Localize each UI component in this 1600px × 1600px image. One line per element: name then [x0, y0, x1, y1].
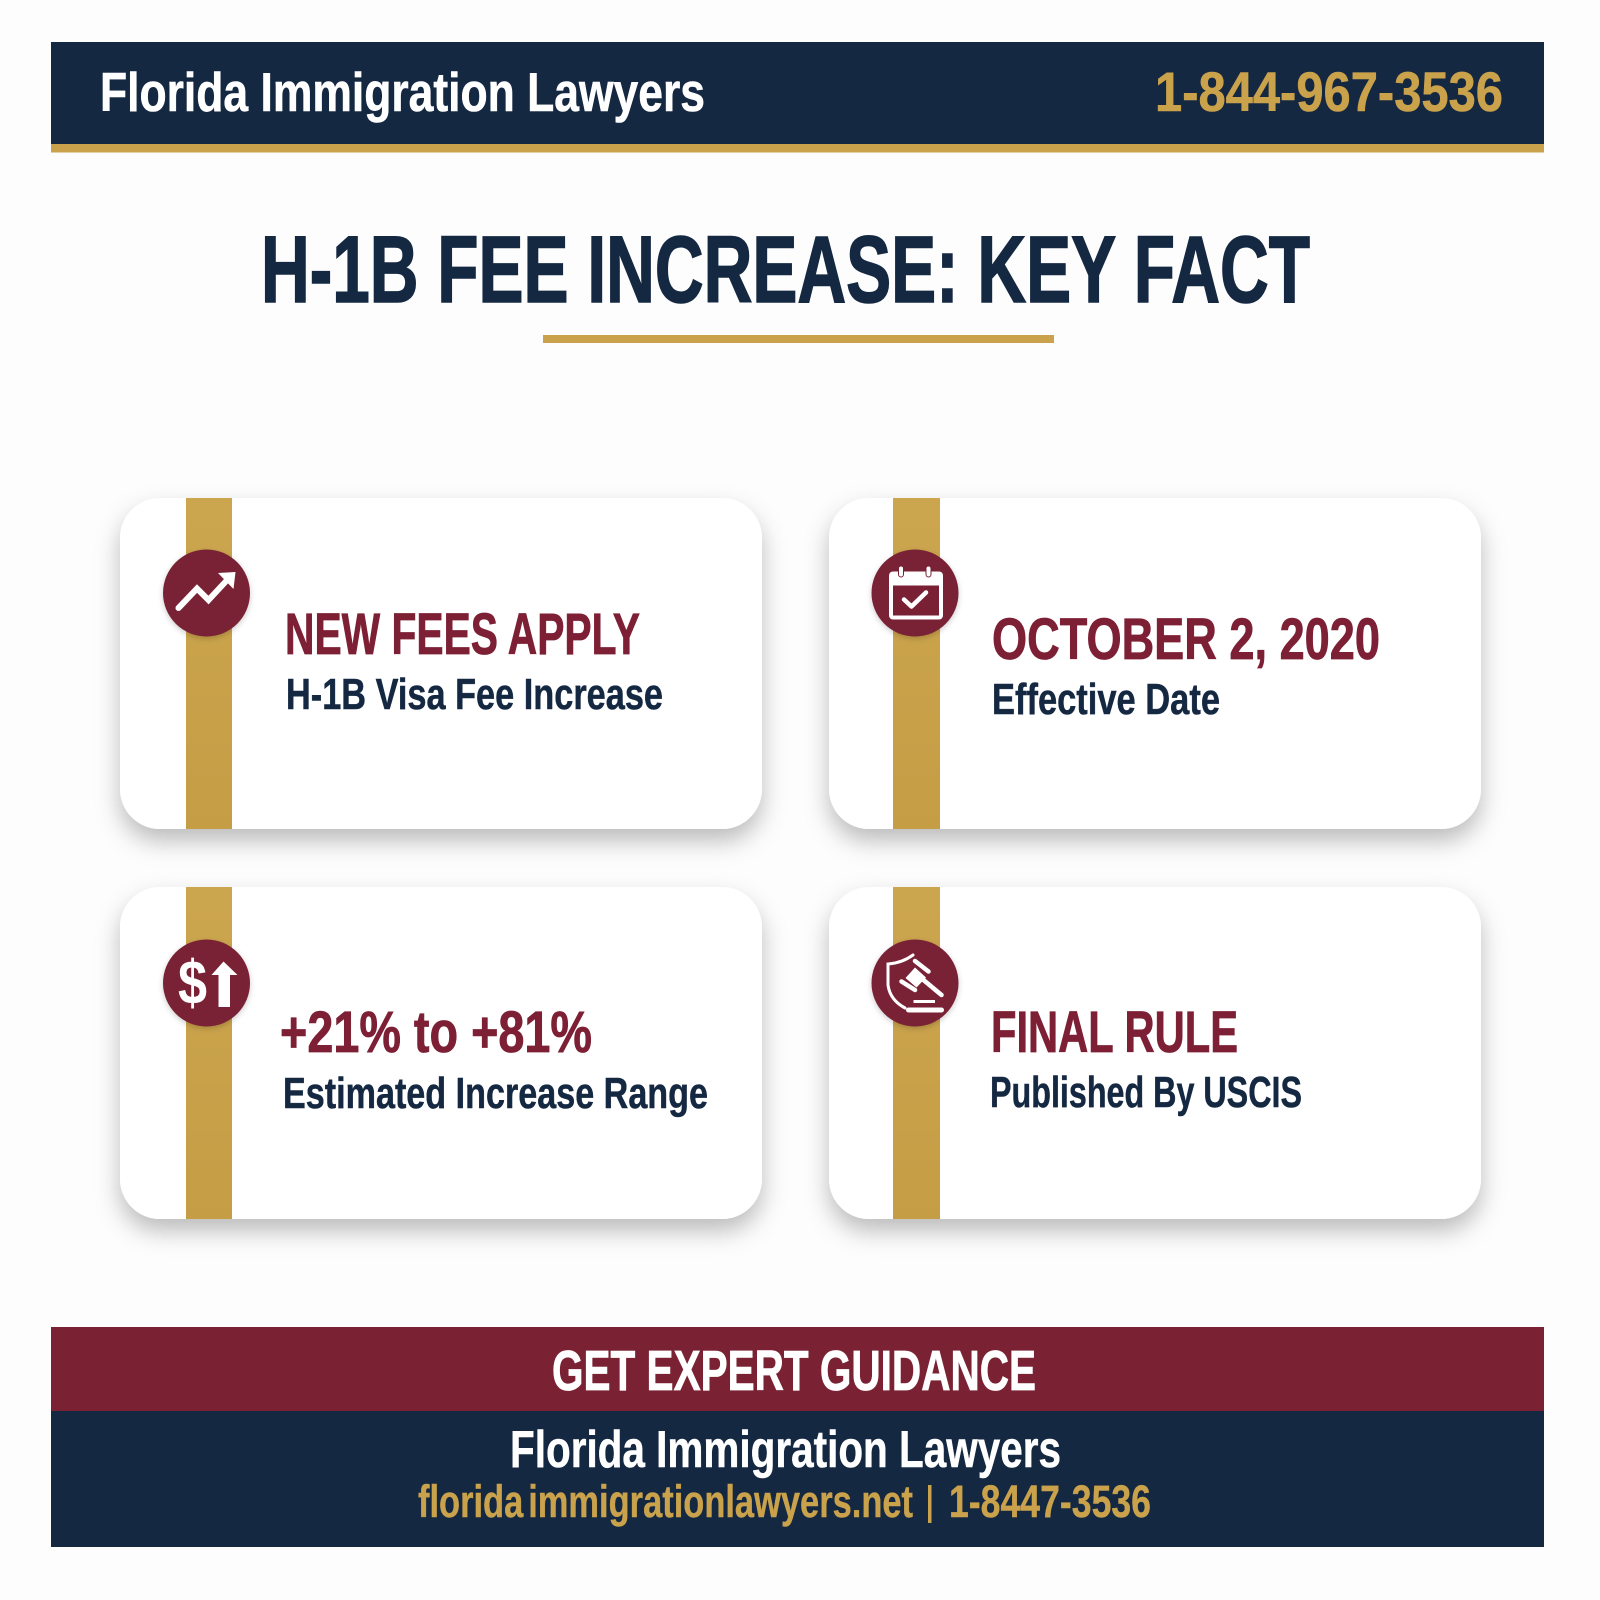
- footer firm name: Florida Immigration Lawyers: [510, 1421, 1061, 1479]
- card heading: +21% to +81%: [280, 1000, 592, 1065]
- card: new fees apply: [120, 498, 762, 829]
- card: estimated increase: [120, 887, 762, 1219]
- card heading: OCTOBER 2, 2020: [992, 607, 1380, 672]
- header phone number: 1-844-967-3536: [1155, 60, 1503, 123]
- card: final rule: [829, 887, 1481, 1219]
- header banner: [51, 42, 1544, 152]
- icon: dollar sign and up arrow: $: [178, 949, 207, 1018]
- card subtext: Published By USCIS: [990, 1068, 1302, 1117]
- card heading: FINAL RULE: [991, 1000, 1238, 1065]
- header firm name: Florida Immigration Lawyers: [100, 61, 705, 123]
- card heading: NEW FEES APPLY: [285, 602, 640, 667]
- footer website and phone: florida immigrationlawyers.net: [418, 1476, 913, 1527]
- call to action text: GET EXPERT GUIDANCE: [552, 1339, 1036, 1403]
- icon: shield and gavel: [872, 940, 958, 1026]
- card: effective date: [829, 498, 1481, 829]
- card subtext: Effective Date: [992, 675, 1220, 724]
- card subtext: H-1B Visa Fee Increase: [286, 670, 663, 719]
- icon: dollar sign and up arrow: [163, 940, 250, 1026]
- title underline: [543, 335, 1054, 343]
- footer website and phone: 1-8447-3536: [949, 1476, 1151, 1527]
- card subtext: Estimated Increase Range: [283, 1069, 708, 1118]
- icon: trending up arrow: [163, 550, 250, 636]
- footer contact band: [51, 1411, 1544, 1547]
- icon: calendar with check: [872, 550, 958, 636]
- footer call to action band: [51, 1327, 1544, 1411]
